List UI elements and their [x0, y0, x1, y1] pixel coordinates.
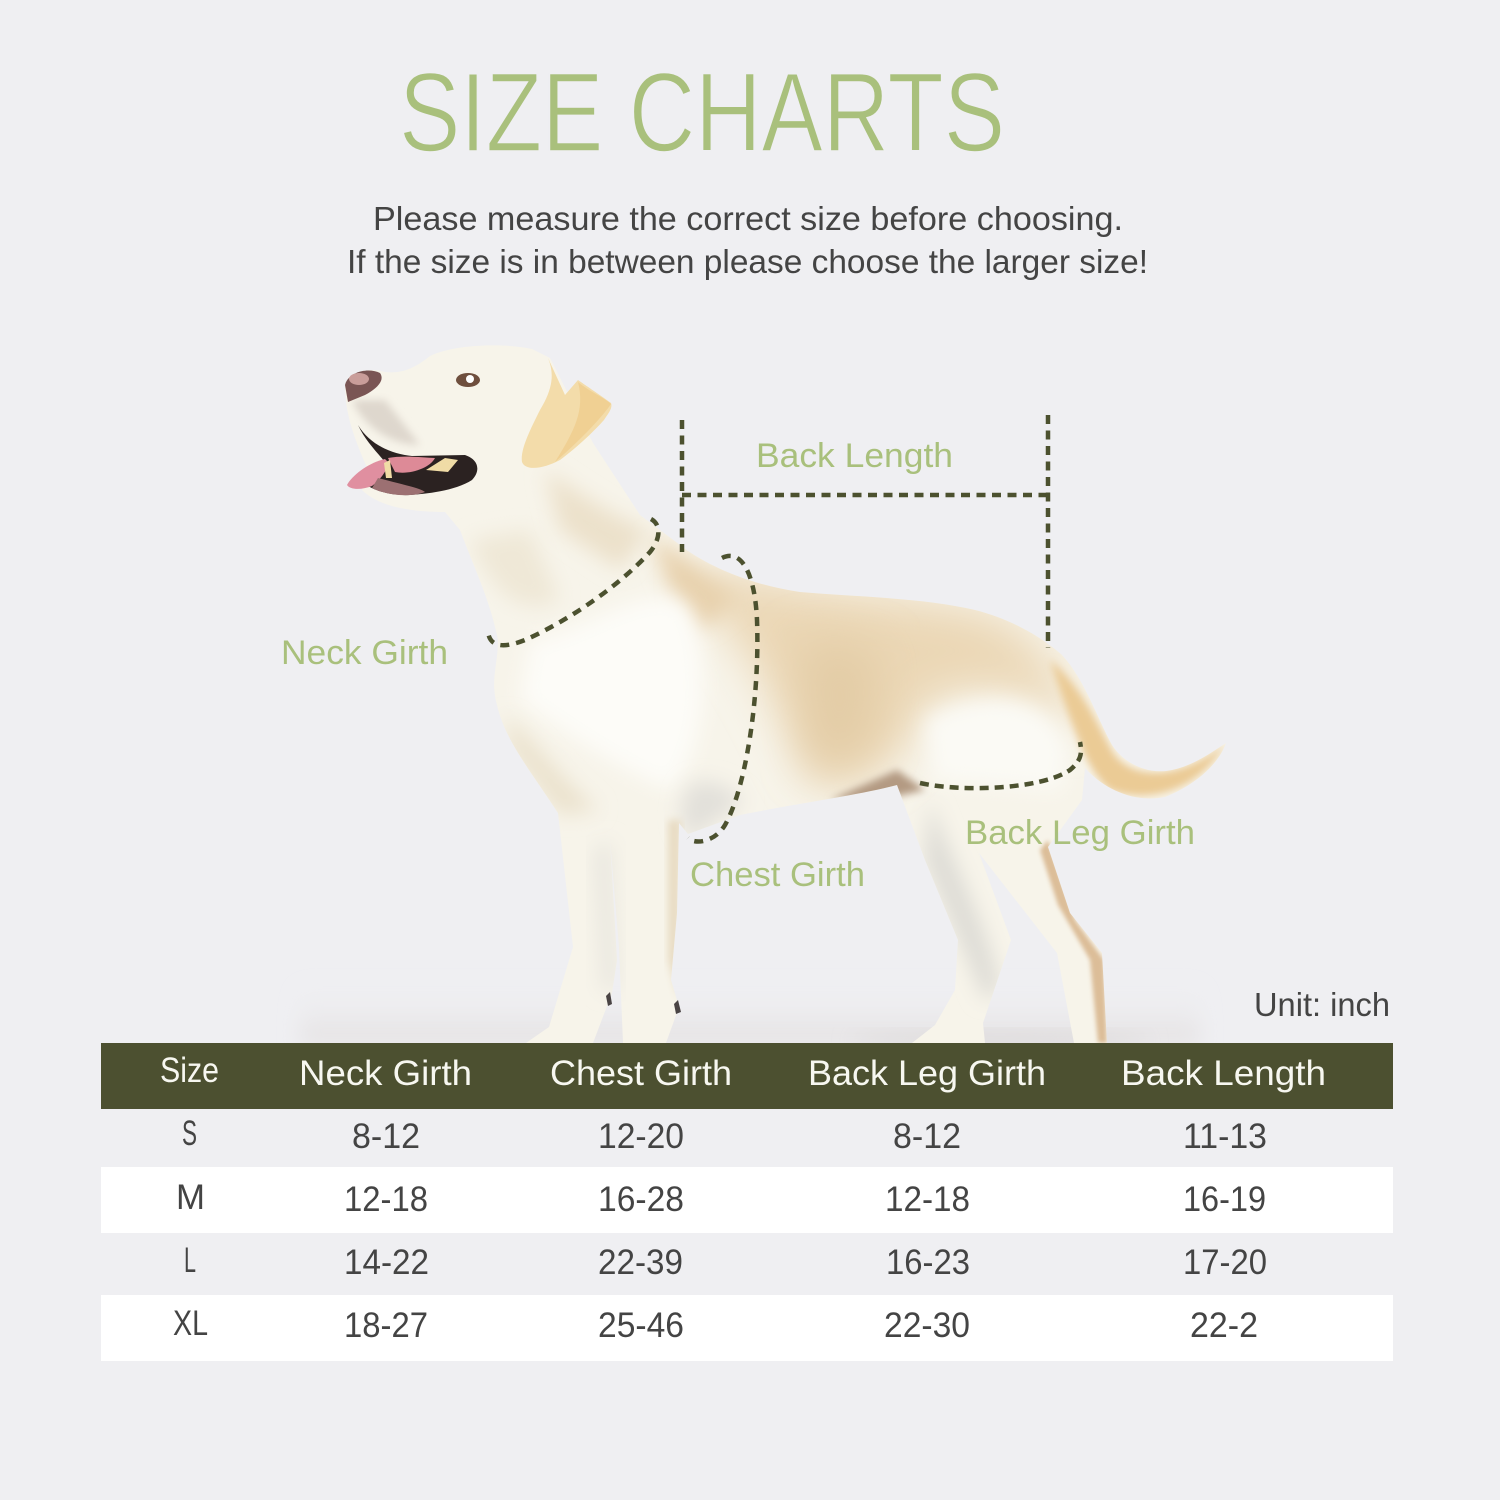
row L: 14-22 [344, 1243, 429, 1282]
row L: L [184, 1241, 196, 1280]
dew claws [606, 992, 681, 1014]
nose [345, 370, 382, 402]
illustration: dog standing in profile [345, 345, 1226, 1043]
row S: 8-12 [352, 1117, 420, 1156]
row XL: 25-46 [598, 1306, 684, 1345]
row L: 16-23 [886, 1243, 970, 1282]
row XL: 22-2 [1190, 1306, 1258, 1345]
measure line: chest girth [688, 556, 757, 842]
label: chest girth: Chest Girth [690, 856, 865, 894]
measure line: back length [682, 415, 1048, 648]
table header: Back Leg Girth [808, 1054, 1046, 1093]
row M: 12-18 [885, 1180, 970, 1219]
row L: 22-39 [598, 1243, 683, 1282]
tongue [347, 459, 388, 489]
title: SIZE CHARTS [399, 50, 1005, 175]
row S: S [182, 1114, 197, 1153]
table header: Chest Girth [550, 1054, 732, 1093]
label: back length: Back Length [756, 437, 953, 475]
table header: Size [160, 1051, 219, 1090]
row M: M [176, 1178, 205, 1217]
row XL: XL [173, 1304, 208, 1343]
measure line: back leg girth [920, 742, 1081, 788]
floor shadow behind dog [300, 985, 1200, 1047]
row L: 17-20 [1183, 1243, 1267, 1282]
row S: 8-12 [893, 1117, 961, 1156]
teeth [384, 458, 458, 478]
row XL: 18-27 [344, 1306, 428, 1345]
row L [184, 1241, 1267, 1282]
row M: 12-18 [344, 1180, 428, 1219]
dog body silhouette [345, 345, 1226, 1043]
table header: Neck Girth [299, 1054, 472, 1093]
row S [182, 1114, 1267, 1156]
row XL: 22-30 [884, 1306, 970, 1345]
eye [456, 373, 480, 387]
instruction text: If the size is in between please choose the larger size! [347, 243, 1148, 280]
coat shading [352, 400, 1226, 1043]
row M: 16-28 [598, 1180, 684, 1219]
label: back leg girth: Back Leg Girth [965, 814, 1195, 852]
row M [101, 1167, 1393, 1233]
instruction text [347, 200, 1148, 280]
measure line: neck girth [488, 519, 658, 645]
label: neck girth: Neck Girth [281, 634, 448, 672]
row S: 11-13 [1183, 1117, 1267, 1156]
row XL [101, 1295, 1393, 1361]
table header [101, 1043, 1393, 1109]
size table [101, 1043, 1393, 1361]
table header: Back Length [1121, 1054, 1326, 1093]
ear [522, 358, 611, 468]
unit note: Unit: inch [1254, 986, 1390, 1023]
lower lip [372, 478, 425, 495]
row M: 16-19 [1183, 1180, 1266, 1219]
instruction text: Please measure the correct size before choosing. [373, 200, 1123, 237]
mouth [358, 425, 477, 495]
row S: 12-20 [598, 1117, 684, 1156]
